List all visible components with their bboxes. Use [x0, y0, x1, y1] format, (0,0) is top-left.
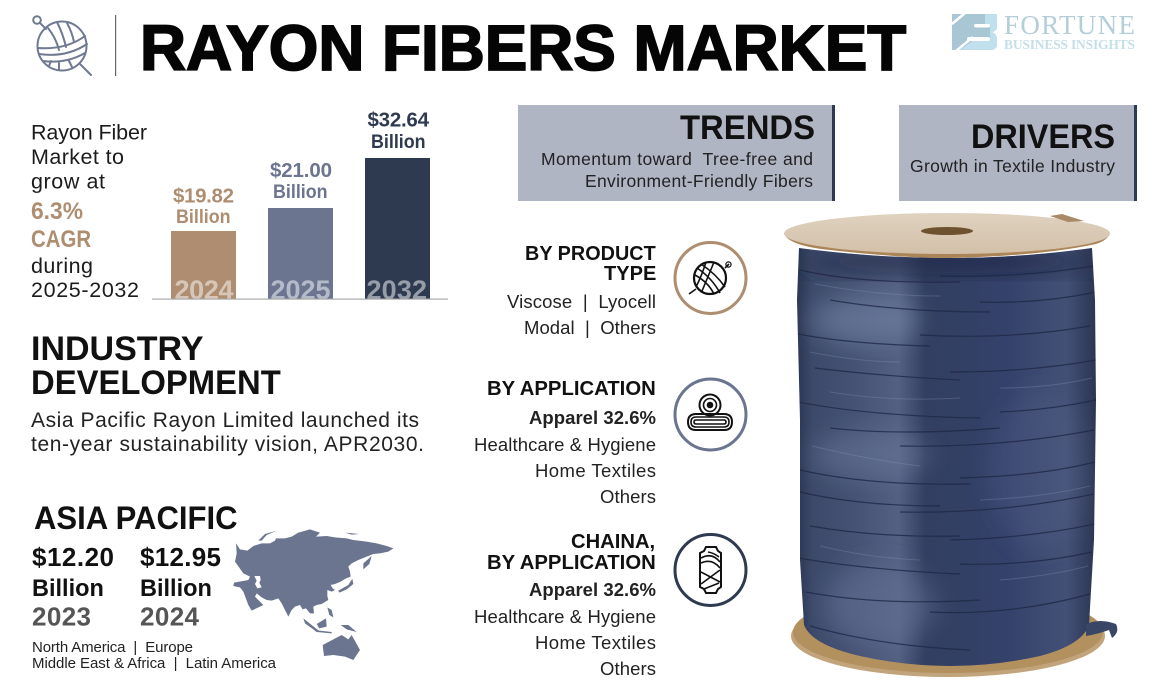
unit 2023: Billion: [32, 575, 104, 602]
CAGR statement: 2025-2032: [31, 278, 139, 302]
bar label unit 2024: Billion: [176, 207, 231, 228]
segment: china by application values: [474, 579, 656, 679]
panel: trends: Momentum toward Tree-free and: [541, 149, 813, 169]
segment: by application values: [474, 407, 656, 507]
bar label unit 2025: Billion: [273, 182, 328, 203]
CAGR statement: [31, 120, 147, 302]
heading: china by application: BY APPLICATION: [487, 551, 656, 574]
bar label unit 2032: Billion: [371, 132, 426, 153]
segment: china by application values: Others: [600, 658, 656, 679]
asia pacific map: [233, 529, 393, 660]
other regions: Middle East & Africa | Latin America: [32, 655, 277, 672]
CAGR statement: Market to: [31, 145, 124, 169]
header divider: [115, 15, 116, 76]
segment: by product type values: Viscose | Lyocell: [507, 291, 656, 312]
asia pacific stats: [32, 542, 221, 632]
heading: by application: BY APPLICATION: [487, 377, 656, 400]
segment: by application values: Home Textiles: [535, 460, 656, 481]
icon: yarn ball in circle: [675, 242, 746, 314]
other regions: [32, 639, 277, 672]
panel: drivers: [899, 105, 1137, 201]
heading: trends: TRENDS: [680, 109, 815, 147]
bar 2032: 2032: [366, 275, 427, 305]
bar 2025: $21.00: [270, 159, 332, 182]
logo: Fortune Business Insights: BUSINESS INSIGHTS: [1004, 37, 1135, 52]
bar 2032: $32.64: [368, 108, 430, 132]
industry development text: [31, 409, 424, 456]
segment: by product type values: Modal | Others: [524, 317, 656, 338]
icon: thread spool in circle: [675, 534, 746, 606]
asia pacific stats: $12.95: [140, 542, 221, 572]
bar 2024: $19.82: [173, 184, 234, 208]
bar 2024: 2024: [174, 275, 234, 305]
segment: china by application values: Apparel 32.6%: [529, 579, 656, 600]
segment: by application values: Others: [600, 486, 656, 507]
asia pacific stats: $12.20: [32, 542, 114, 572]
yarn body: [797, 248, 1100, 666]
segment: by application values: Apparel 32.6%: [529, 407, 656, 428]
segment: by product type values: [507, 291, 656, 338]
industry development text: ten-year sustainability vision, APR2030.: [31, 433, 424, 456]
bar 2025: [268, 159, 333, 305]
icon: folded textiles in circle: [675, 379, 746, 450]
bar 2025: 2025: [270, 275, 330, 305]
asia pacific stats: 2023: [32, 602, 91, 632]
spool bottom flange: [791, 591, 1105, 677]
loose fibre end: [1086, 621, 1117, 638]
CAGR statement: during: [31, 254, 93, 278]
spool top flange: [784, 213, 1110, 258]
CAGR statement: Rayon Fiber: [31, 120, 147, 144]
heading: industry development: INDUSTRY: [31, 330, 204, 368]
cagr value: 6.3%: [31, 198, 83, 225]
cagr label: CAGR: [31, 226, 91, 253]
panel: drivers: Growth in Textile Industry: [910, 156, 1115, 176]
logo: Fortune Business Insights: FORTUNE: [1004, 10, 1135, 40]
logo: Fortune Business Insights: [952, 10, 1135, 52]
heading: asia pacific: ASIA PACIFIC: [34, 500, 237, 536]
heading: drivers: DRIVERS: [971, 118, 1115, 156]
panel: trends: Environment-Friendly Fibers: [585, 171, 813, 191]
unit 2024: Billion: [140, 575, 212, 602]
bar 2032: [365, 108, 430, 305]
image: rayon spool: [784, 213, 1117, 677]
heading: chaina: CHAINA,: [571, 530, 655, 553]
panel: trends: [518, 105, 835, 201]
heading: development: DEVELOPMENT: [31, 364, 281, 402]
segment: china by application values: Home Textiles: [535, 632, 656, 653]
heading: type: TYPE: [604, 262, 656, 285]
asia pacific stats: 2024: [140, 602, 200, 632]
bar 2024: [171, 184, 236, 305]
bar chart: market size: [152, 108, 448, 305]
other regions: North America | Europe: [32, 639, 193, 656]
segment: china by application values: Healthcare & Hygiene: [474, 606, 656, 627]
icon: yarn ball header: [33, 16, 91, 75]
title: RAYON FIBERS MARKET: [140, 12, 906, 84]
industry development text: Asia Pacific Rayon Limited launched its: [31, 409, 419, 432]
segment: by application values: Healthcare & Hygiene: [474, 434, 656, 455]
heading: by product: BY PRODUCT: [525, 242, 656, 265]
CAGR statement: grow at: [31, 170, 105, 194]
